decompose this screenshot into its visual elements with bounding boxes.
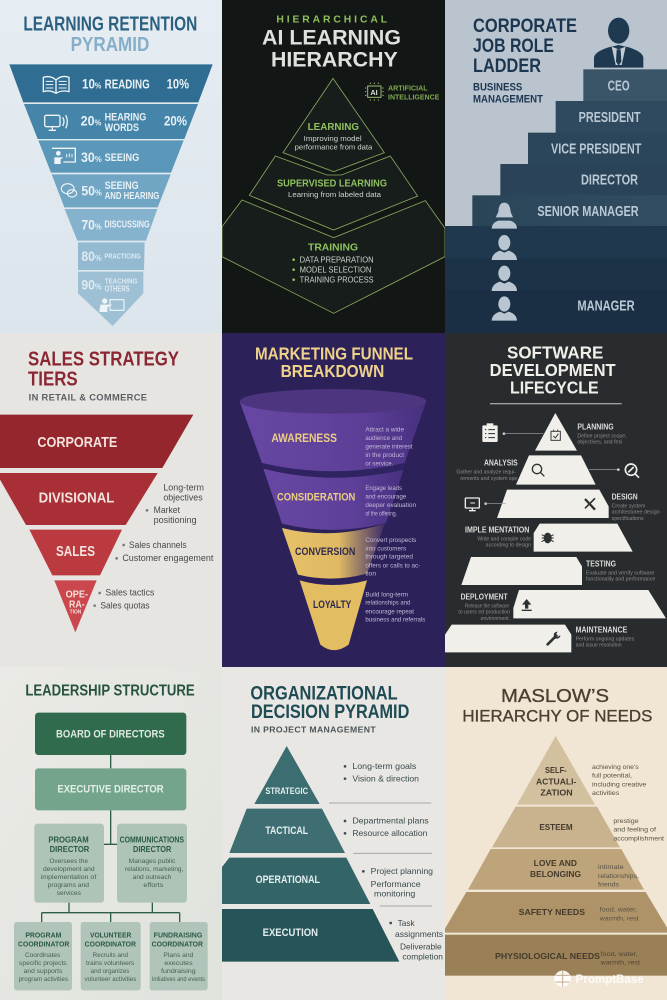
bullets: execution: Task — [398, 918, 415, 928]
panel: software development lifecycle — [445, 333, 667, 667]
box: volunteer coordinator: Recruits and — [93, 952, 128, 959]
tier labels: OPE- — [66, 589, 88, 600]
band labels and percentages: 50% — [81, 183, 102, 199]
description: loyalty: business and referrals — [365, 617, 426, 624]
box: fundraising coordinator: FUNDRAISING — [154, 930, 202, 939]
tier labels — [37, 435, 118, 616]
band labels and percentages: SEEING — [105, 152, 139, 164]
description: awareness: audience and — [365, 435, 402, 442]
staggered pyramid tiers — [445, 413, 666, 652]
bullets: execution: completion — [402, 951, 443, 961]
band labels and percentages: 90% — [81, 276, 102, 292]
heading: learning retention pyramid: PYRAMID — [71, 34, 149, 56]
text: analysis: ANALYSIS — [484, 459, 518, 468]
description: self-actualization — [592, 764, 647, 797]
heading: AI learning hierarchy: AI LEARNING — [262, 25, 401, 49]
text: design: Create system — [612, 503, 646, 509]
heading: corporate job role ladder: LADDER — [473, 56, 541, 77]
band labels and percentages: 70% — [81, 216, 102, 232]
bullets: divisional: Long-term — [163, 482, 204, 492]
box: program director: services — [57, 890, 82, 897]
connector: design — [484, 502, 506, 505]
label: artificial intelligence — [388, 85, 440, 101]
funnel stage: awareness: AWARENESS — [271, 432, 337, 445]
heading: AI learning hierarchy: HIERARCHICAL — [276, 14, 387, 25]
staircase steps — [445, 69, 667, 333]
box: fundraising coordinator: COORDINATOR — [152, 939, 203, 948]
heading: organizational decision pyramid — [250, 683, 409, 735]
text: maintenance: Perform ongoing updates — [576, 636, 634, 642]
step labels: CEO — [608, 79, 630, 95]
description: love and belonging: relationships, — [598, 873, 639, 880]
heading: corporate job role ladder: MANAGEMENT — [473, 94, 543, 106]
description: consideration: Engage leads — [365, 485, 403, 492]
icon: analysis magnifier — [532, 464, 544, 476]
description: esteem: accomplishment — [613, 835, 664, 842]
funnel stage: loyalty — [300, 580, 367, 650]
bullets: execution: assignments — [395, 929, 444, 939]
tier labels: TACTICAL — [265, 825, 308, 837]
text: deployment — [458, 592, 510, 622]
bullets: strategic: Long-term goals — [352, 761, 417, 771]
step labels: MANAGER — [577, 299, 635, 315]
bullets: sales: Customer engagement — [122, 553, 214, 563]
box: fundraising coordinator: Plans and — [163, 952, 194, 959]
icon: presenter at board — [52, 148, 75, 164]
text: maintenance — [576, 626, 634, 649]
bullets: operational: Project planning — [371, 866, 433, 876]
text: deployment: DEPLOYMENT — [461, 592, 508, 601]
text: testing: functionality and performance — [586, 577, 655, 583]
box: board of directors — [35, 713, 186, 755]
band labels and percentages: AND HEARING — [105, 191, 159, 202]
band labels and percentages: 20% — [81, 113, 102, 129]
description: self-actualization: full potential, — [592, 773, 632, 780]
connector: analysis — [589, 468, 620, 471]
band labels and percentages: 30% — [81, 149, 102, 165]
box: volunteer coordinator: VOLUNTEER — [90, 930, 132, 939]
bullets: operational: monitoring — [374, 889, 416, 899]
tier text: learning: performance from data — [295, 143, 373, 152]
text: implementation: Write and compile code — [477, 537, 531, 543]
band labels and percentages: 10% — [167, 76, 189, 92]
band labels and percentages: TEACHING — [105, 276, 137, 285]
tier labels: BELONGING — [530, 869, 581, 879]
description: loyalty: Build long-term — [365, 591, 408, 598]
box: communications director: DIRECTOR — [133, 844, 172, 854]
text: analysis: Gather and analyze requi- — [456, 469, 516, 475]
tier text: training — [292, 243, 374, 284]
description: safety needs — [599, 906, 639, 922]
icon: AI chip — [365, 83, 384, 101]
description: esteem — [613, 818, 664, 842]
heading: AI learning hierarchy: HIERARCHY — [271, 48, 398, 72]
band labels and percentages: HEARING — [105, 111, 146, 123]
description: awareness: generate interest — [365, 444, 413, 451]
watermark: PromptBase — [554, 971, 644, 987]
funnel stage: loyalty: LOYALTY — [313, 599, 352, 611]
text: planning: objectives, and fesi — [577, 440, 622, 446]
text: planning: PLANNING — [577, 422, 614, 431]
box: program director: PROGRAM — [48, 835, 89, 845]
tier labels: SELF- — [545, 765, 567, 775]
tier labels: EXECUTION — [263, 927, 318, 939]
heading: learning retention pyramid — [23, 14, 197, 56]
description: conversion: tion — [365, 571, 376, 578]
icon: monitor with sound — [45, 115, 67, 130]
tier labels: ACTUALI- — [536, 776, 576, 786]
box: program coordinator: PROGRAM — [25, 930, 61, 939]
box: fundraising coordinator — [150, 922, 208, 990]
panel: learning retention pyramid — [0, 0, 222, 333]
text: testing: TESTING — [586, 559, 616, 568]
description: self-actualization: achieving one's — [592, 764, 639, 771]
description: physiological needs: food, water, — [601, 951, 638, 958]
heading: marketing funnel breakdown: BREAKDOWN — [281, 361, 384, 381]
icon: AI chip: AI — [370, 88, 378, 97]
text: design: DESIGN — [612, 492, 638, 501]
tier labels — [495, 765, 600, 961]
tier text: supervised learning — [277, 178, 387, 199]
watermark: PromptBase: PromptBase — [576, 972, 644, 986]
heading: software development lifecycle: LIFECYCLE — [510, 377, 599, 397]
icon: upload arrow — [522, 599, 532, 611]
pyramid tiers — [222, 746, 399, 962]
description: conversion: into customers — [365, 545, 407, 552]
step labels: SENIOR MANAGER — [537, 204, 639, 220]
heading: software development lifecycle: SOFTWARE — [507, 343, 603, 363]
panel: organizational decision pyramid — [222, 667, 445, 1000]
heading: sales strategy tiers: TIERS — [28, 369, 78, 391]
box: program director: Oversees the — [49, 858, 88, 865]
text: design: specifications — [612, 516, 644, 522]
tier text: learning — [295, 122, 373, 152]
icon: man 3 — [492, 296, 517, 321]
heading: leadership structure: LEADERSHIP STRUCTURE — [25, 683, 195, 700]
panel: marketing funnel breakdown — [222, 333, 445, 667]
description: consideration: and encourage — [365, 494, 407, 501]
band labels and percentages: DISCUSSING — [104, 220, 150, 231]
panel: sales strategy tiers — [0, 333, 222, 667]
heading: corporate job role ladder: BUSINESS — [473, 81, 523, 93]
pyramid outline tiers — [222, 78, 445, 313]
box: program coordinator: program activities — [19, 976, 69, 983]
bullets: divisional: positioning — [154, 515, 197, 525]
box: board of directors: BOARD OF DIRECTORS — [56, 728, 165, 740]
band labels and percentages: 20% — [164, 113, 187, 129]
description: consideration — [365, 485, 416, 517]
text: testing: Evaluate and verrify software — [586, 570, 654, 576]
heading: marketing funnel breakdown — [255, 344, 413, 381]
band labels and percentages: PRACTICING — [104, 251, 141, 260]
description: self-actualization: including creative — [592, 781, 647, 788]
tier labels: OPERATIONAL — [256, 874, 320, 886]
description: awareness — [365, 426, 413, 468]
heading: software development lifecycle — [490, 343, 616, 397]
box: communications director: COMMUNICATIONS — [120, 834, 184, 844]
description: love and belonging — [598, 864, 639, 889]
icon: bug — [542, 533, 554, 543]
icon: man 1 — [492, 235, 517, 260]
tier labels: TION — [70, 610, 82, 616]
inverted tier shapes — [0, 415, 193, 632]
text: design: architecturee design — [612, 510, 660, 516]
text: deployment: Release the software — [465, 603, 509, 609]
box: volunteer coordinator: trains volunteers — [86, 960, 135, 967]
box: program director: programs and — [48, 882, 89, 889]
description: conversion: offers or calls to ac- — [365, 562, 420, 569]
panel: Maslow's hierarchy of needs — [445, 667, 667, 1000]
heading: marketing funnel breakdown: MARKETING FUNNEL — [255, 344, 413, 364]
box: communications director — [117, 824, 187, 903]
description: physiological needs: warmth, rest — [600, 960, 640, 967]
text: deployment: to users ed production — [458, 610, 510, 616]
description: esteem: prestige — [613, 818, 639, 825]
box: communications director: efforts — [143, 882, 164, 889]
bullets: tactical — [344, 816, 429, 838]
funnel stage: awareness — [240, 389, 426, 478]
tier text: learning: Improving model — [304, 134, 362, 143]
bullets: operational — [362, 866, 433, 899]
box: communications director: and outreach — [133, 874, 172, 881]
icon: teacher at board — [99, 298, 124, 312]
heading: organizational decision pyramid: DECISION PYRAMID — [251, 702, 409, 723]
bullets: strategic — [344, 761, 419, 783]
box: program director: implementation of — [41, 874, 96, 881]
tier labels: ESTEEM — [539, 822, 573, 832]
tier text: supervised learning: Learning from labeled data — [288, 190, 382, 199]
icon: man 2 — [492, 266, 517, 291]
band labels and percentages: SEEING — [105, 180, 139, 192]
bullets: tactical: Resource allocation — [352, 828, 428, 838]
text: analysis — [456, 459, 518, 482]
heading: sales strategy tiers: SALES STRATEGY — [28, 349, 180, 371]
bullets: operation: Sales quotas — [100, 601, 150, 611]
tier text: training: MODEL SELECTION — [300, 265, 372, 274]
description: loyalty — [365, 591, 426, 624]
icon: magnifier right — [625, 464, 639, 478]
tier labels: SAFETY NEEDS — [519, 907, 585, 917]
tier labels — [256, 786, 320, 939]
bullets: divisional: objectives — [163, 492, 203, 502]
bullets: sales: Sales channels — [129, 540, 187, 550]
tier labels: CORPORATE — [37, 435, 118, 451]
step labels — [537, 79, 642, 315]
description: consideration: of the offering. — [365, 510, 397, 517]
text: analysis: rements and system spe — [460, 476, 517, 482]
bullets: operation — [93, 588, 155, 611]
heading: corporate job role ladder: CORPORATE — [473, 16, 577, 37]
label: artificial intelligence: ARTIFICIAL — [388, 85, 428, 92]
icon: planning check box — [551, 430, 560, 440]
icon: open book — [43, 77, 69, 93]
description: awareness: or service. — [365, 461, 393, 468]
funnel stage: conversion: CONVERSION — [295, 546, 355, 558]
tier text: supervised learning: SUPERVISED LEARNING — [277, 178, 387, 189]
bullets: strategic: Vision & direction — [352, 773, 419, 783]
icon: CEO silhouette — [594, 18, 643, 68]
icon: speech bubbles — [61, 184, 77, 197]
bullets: sales — [115, 540, 214, 563]
divider lines — [329, 803, 432, 906]
panel: leadership structure — [0, 667, 222, 1000]
heading: software development lifecycle: DEVELOPMENT — [490, 360, 616, 380]
text: maintenance: MAINTENANCE — [576, 626, 628, 635]
text: testing — [586, 559, 655, 583]
tier labels: STRATEGIC — [265, 786, 308, 796]
band labels and percentages: OTHERS — [105, 284, 130, 294]
step labels: VICE PRESIDENT — [551, 141, 642, 157]
description: consideration: deeper evaluation — [365, 502, 416, 509]
description: conversion: through targeted — [365, 554, 413, 561]
text: planning — [577, 422, 627, 446]
description: conversion: Convert prospects — [365, 537, 417, 544]
box: program coordinator — [14, 922, 72, 990]
panel: corporate job role ladder — [445, 0, 667, 333]
heading: sales strategy tiers — [28, 349, 180, 403]
heading: Maslow's hierarchy of needs — [462, 685, 652, 726]
connector: planning — [503, 432, 543, 435]
band labels and percentages — [81, 76, 189, 294]
text: maintenance: and issue resolution — [576, 643, 622, 649]
funnel stage: conversion — [282, 524, 385, 579]
box: program coordinator: and supports — [24, 968, 63, 975]
box: fundraising coordinator: executes — [164, 960, 193, 967]
box: executive director — [35, 768, 186, 810]
box: communications director: relations, marketing, — [125, 866, 183, 873]
description: love and belonging: intimate — [598, 864, 624, 871]
funnel stage: consideration — [263, 469, 404, 530]
description: conversion — [365, 537, 420, 578]
tier labels: SALES — [56, 544, 95, 560]
tier labels: PHYSIOLOGICAL NEEDS — [495, 951, 600, 961]
band labels and percentages: 10% — [82, 76, 102, 92]
text: implementation: IMPLE MENTATION — [465, 525, 530, 534]
heading: AI learning hierarchy — [262, 14, 401, 72]
description: safety needs: warmth, rest — [599, 915, 639, 922]
box: volunteer coordinator: and organizes — [91, 968, 130, 975]
heading: corporate job role ladder: JOB ROLE — [473, 36, 554, 57]
box: executive director: EXECUTIVE DIRECTOR — [57, 784, 164, 796]
funnel stage: consideration: CONSIDERATION — [277, 492, 355, 504]
bullets: operation: Sales tactics — [105, 588, 155, 598]
icon: wrench — [548, 632, 560, 644]
description: loyalty: relationships and — [365, 600, 411, 607]
box: volunteer coordinator: COORDINATOR — [85, 939, 136, 948]
tier text: training: TRAINING — [308, 243, 358, 254]
bullets: execution — [389, 918, 444, 961]
band labels and percentages: READING — [105, 77, 150, 92]
panel: AI learning hierarchy — [222, 0, 445, 333]
box: communications director: Manages public — [129, 858, 176, 865]
text: planning: Define project scope, — [577, 433, 627, 439]
description: awareness: in the product — [365, 452, 404, 459]
text: implementation: according to design — [486, 543, 531, 549]
pyramid tiers — [445, 736, 667, 976]
box: volunteer coordinator — [81, 922, 141, 990]
box: volunteer coordinator: volunteer activities — [85, 976, 137, 983]
bullets: divisional: Market — [154, 505, 180, 515]
box: program director: DIRECTOR — [50, 844, 90, 854]
band labels and percentages: 80% — [81, 248, 102, 264]
box: program coordinator: COORDINATOR — [18, 939, 70, 948]
text: deployment: environment. — [481, 616, 510, 622]
org chart connectors — [42, 755, 180, 922]
icon: code monitor — [465, 498, 479, 511]
tier text: training: TRAINING PROCESS — [300, 275, 374, 284]
bullets: tactical: Departmental plans — [352, 816, 429, 826]
box: fundraising coordinator: initiatives and events — [152, 976, 206, 983]
step labels: DIRECTOR — [581, 173, 638, 189]
heading: organizational decision pyramid: ORGANIZATIONAL — [250, 683, 398, 704]
description: awareness: Attract a wide — [365, 426, 404, 433]
tier labels: DIVISIONAL — [39, 491, 114, 507]
bullets: divisional — [146, 482, 204, 525]
step labels: PRESIDENT — [579, 110, 641, 126]
tier labels: LOVE AND — [534, 858, 577, 868]
bullets: operational: Performance — [371, 879, 421, 889]
label: artificial intelligence: INTELLIGENCE — [388, 94, 440, 101]
inverted funnel bands — [9, 64, 213, 326]
band labels and percentages: WORDS — [105, 122, 139, 134]
description: physiological needs — [600, 951, 640, 967]
heading: organizational decision pyramid: IN PROJECT MANAGEMENT — [251, 725, 376, 735]
heading: Maslow's hierarchy of needs: MASLOW’S — [501, 685, 609, 706]
icon: woman manager — [492, 203, 517, 229]
box: program director: development and — [43, 866, 95, 873]
icon: pencil and ruler — [585, 498, 595, 510]
box: program coordinator: Coordinates — [25, 952, 61, 959]
icon: clipboard checklist — [482, 423, 498, 442]
tier text: learning: LEARNING — [308, 122, 359, 133]
heading: corporate job role ladder — [473, 16, 577, 106]
description: esteem: and feeling of — [613, 827, 656, 834]
description: self-actualization: activities — [592, 790, 620, 797]
heading: Maslow's hierarchy of needs: HIERARCHY OF NEEDS — [462, 707, 652, 726]
text: design — [612, 492, 660, 522]
box: program director — [34, 824, 104, 903]
description: love and belonging: friends — [598, 882, 620, 889]
tier labels: RA- — [69, 599, 85, 610]
box: program coordinator: specific projects — [19, 960, 67, 967]
description: loyalty: encourage repeat — [365, 608, 414, 615]
tier labels: ZATION — [540, 788, 573, 798]
heading: sales strategy tiers: IN RETAIL & COMMERCE — [29, 393, 147, 403]
text: implementation — [465, 525, 531, 549]
tier text: training: DATA PREPARATION — [300, 255, 374, 264]
description: safety needs: food, water, — [600, 906, 637, 913]
bullets: execution: Deliverable — [400, 941, 442, 951]
box: fundraising coordinator: fundraising — [161, 968, 196, 975]
